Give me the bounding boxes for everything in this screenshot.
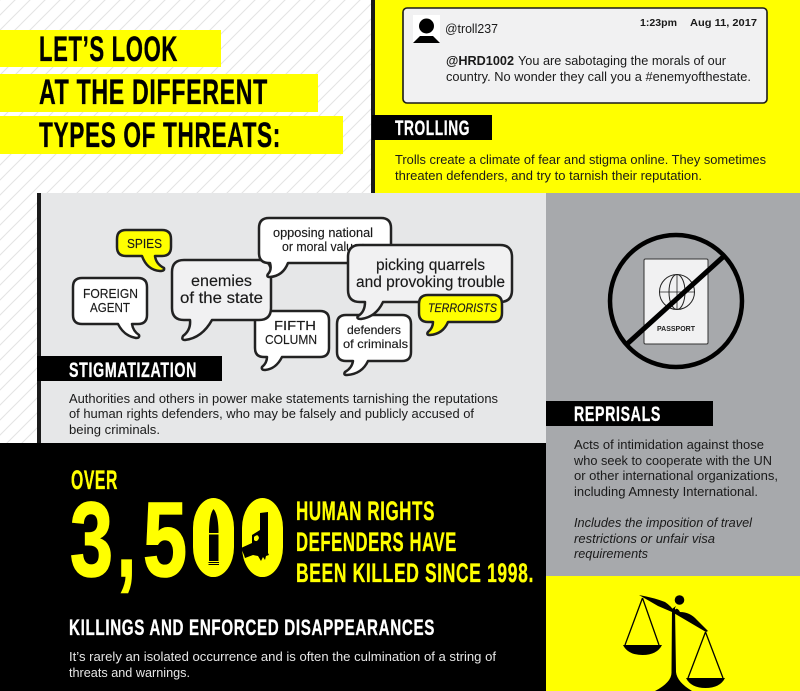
heading: reprisals: REPRISALS: [574, 402, 661, 426]
title: TYPES OF THREATS:: [39, 116, 281, 155]
text: stigmatization description: Authorities and others in power make statements tarnishing the reputations: [69, 391, 498, 406]
bubble: defenders of criminals: [337, 315, 411, 375]
icon: unbalanced scales: [623, 595, 725, 691]
text: reprisals note: Includes the imposition of travel: [574, 515, 753, 530]
text: over: OVER: [71, 465, 118, 495]
text: trolling description: Trolls create a climate of fear and stigma online. They sometimes: [395, 152, 766, 167]
bubble: fifth column: [255, 311, 329, 370]
tweet card: [403, 8, 767, 103]
text: reprisals note: requirements: [574, 546, 648, 561]
bubble: foreign agent: FOREIGN: [83, 286, 138, 301]
bubble: picking quarrels and provoking trouble: [348, 245, 512, 319]
panel: scales: [546, 576, 800, 691]
panel: stigmatization: [37, 193, 546, 443]
bubble: enemies of the state: [172, 260, 271, 340]
tweet card: Aug 11, 2017: [690, 18, 757, 29]
tweet card: You are sabotaging the morals of our: [518, 53, 727, 68]
text: trolling description: [395, 152, 766, 183]
heading: trolling: [372, 115, 492, 140]
bubble: defenders of criminals: of criminals: [343, 337, 408, 351]
heading: trolling: TROLLING: [395, 116, 470, 140]
bubble: opposing national or moral values: [259, 218, 391, 277]
text: reprisals description: or other international organizations,: [574, 468, 778, 483]
bubble: spies: [117, 230, 171, 271]
big number: 3,500: [70, 478, 283, 599]
bubble: foreign agent: AGENT: [90, 300, 130, 315]
big number: 3,500: 0: [193, 478, 234, 599]
panel: killings and enforced disappearances: [0, 443, 546, 691]
bubble: picking quarrels and provoking trouble: picking quarrels: [376, 257, 485, 274]
text: killings description: It’s rarely an isolated occurrence and is often the culmination of a string of: [69, 649, 496, 664]
bubble: terrorists: TERRORISTS: [428, 303, 497, 315]
text: human rights defenders have been killed: DEFENDERS HAVE: [296, 527, 457, 557]
big number: 3,500: 3: [70, 481, 113, 599]
bubble: opposing national or moral values: or moral values: [282, 239, 366, 254]
text: human rights defenders have been killed: BEEN KILLED SINCE 1998.: [296, 558, 534, 588]
bubble: fifth column: COLUMN: [265, 332, 317, 347]
text: reprisals description: including Amnesty International.: [574, 484, 758, 499]
text: stigmatization description: [69, 391, 498, 437]
text: stigmatization description: of human rights defenders, who may be falsely and publicly accused of: [69, 406, 474, 421]
icon: bullet: [208, 509, 219, 565]
bubble: fifth column: FIFTH: [274, 318, 316, 333]
text: stigmatization description: being criminals.: [69, 422, 160, 437]
text: killings description: [69, 649, 496, 680]
tweet card: @HRD1002: [446, 53, 514, 68]
text: human rights defenders have been killed: HUMAN RIGHTS: [296, 496, 435, 526]
icon: hand with gun: [241, 512, 269, 561]
big number: 3,500: 5: [143, 481, 187, 599]
bubble: enemies of the state: enemies: [191, 273, 252, 290]
icon: crossed-out passport: PASSPORT: [657, 324, 695, 333]
bubble: foreign agent: [73, 278, 147, 338]
title: LET’S LOOK: [39, 30, 178, 69]
text: killings description: threats and warnings.: [69, 665, 190, 680]
panel: reprisals: [546, 193, 800, 576]
heading: stigmatization: STIGMATIZATION: [69, 358, 197, 382]
tweet card: 1:23pm: [640, 18, 677, 29]
text: reprisals description: [573, 437, 778, 499]
tweet card: @troll237: [445, 22, 498, 36]
bubble: defenders of criminals: defenders: [347, 323, 401, 337]
title: [0, 30, 343, 155]
big number: 3,500: ,: [117, 481, 136, 599]
text: trolling description: threaten defenders, and try to tarnish their reputation.: [395, 168, 702, 183]
text: reprisals note: restrictions or unfair visa: [574, 531, 715, 546]
text: human rights defenders have been killed: [296, 496, 534, 588]
title: AT THE DIFFERENT: [39, 73, 268, 112]
icon: crossed-out passport: [610, 235, 742, 367]
bubble: terrorists: [419, 295, 502, 335]
text: reprisals note: [574, 515, 753, 561]
bubble: opposing national or moral values: opposing national: [273, 225, 373, 240]
bubble: enemies of the state: of the state: [180, 290, 263, 307]
speech bubbles: [73, 218, 512, 375]
bubble: picking quarrels and provoking trouble: and provoking trouble: [356, 274, 505, 291]
big number: 3,500: 0: [242, 478, 283, 599]
heading: killings: KILLINGS AND ENFORCED DISAPPEARANCES: [69, 615, 435, 640]
heading: stigmatization: [37, 356, 222, 382]
bubble: spies: SPIES: [127, 236, 162, 251]
panel: trolling: [371, 0, 800, 193]
icon: user avatar: [413, 15, 440, 43]
text: reprisals description: Acts of intimidation against those: [574, 437, 764, 452]
tweet card: country. No wonder they call you a #enemyofthestate.: [446, 69, 751, 84]
text: reprisals description: who seek to cooperate with the UN: [573, 453, 772, 468]
